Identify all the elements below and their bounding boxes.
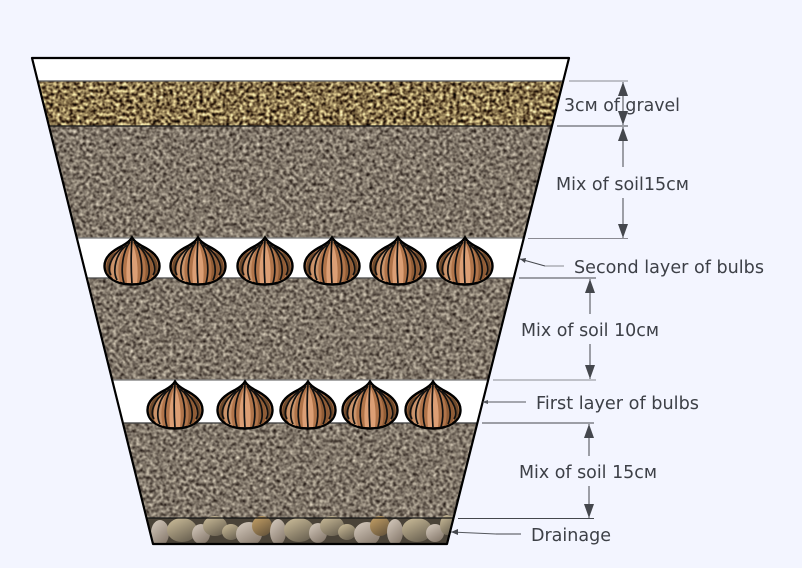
label: middle soil: Mix of soil 10см	[521, 320, 659, 341]
pot with layers	[30, 58, 572, 546]
first bulb layer band	[114, 380, 486, 422]
dimension: middle soil	[493, 278, 659, 380]
dimension: upper soil	[528, 127, 689, 238]
middle soil layer	[88, 278, 512, 380]
drainage pebbles	[148, 515, 452, 543]
gravel layer	[30, 81, 572, 126]
label: drainage: Drainage	[531, 525, 611, 546]
second layer of bulbs row	[104, 238, 492, 284]
pot outline	[32, 58, 569, 544]
callout: second layer of bulbs	[520, 257, 764, 278]
label: lower soil: Mix of soil 15см	[519, 462, 657, 483]
label: gravel: 3см of gravel	[564, 95, 680, 116]
callout: first layer of bulbs	[482, 393, 699, 414]
dimension: lower soil	[458, 423, 657, 518]
label: second layer: Second layer of bulbs	[574, 257, 764, 278]
first layer of bulbs row	[148, 382, 460, 428]
empty rim space	[30, 58, 572, 81]
label: upper soil: Mix of soil15см	[556, 174, 689, 195]
lower soil layer	[124, 424, 476, 518]
label: first layer: First layer of bulbs	[536, 393, 699, 414]
callout: drainage	[451, 525, 611, 546]
upper soil layer	[30, 126, 572, 238]
second bulb layer band	[78, 238, 522, 278]
dimension: gravel	[557, 81, 680, 126]
